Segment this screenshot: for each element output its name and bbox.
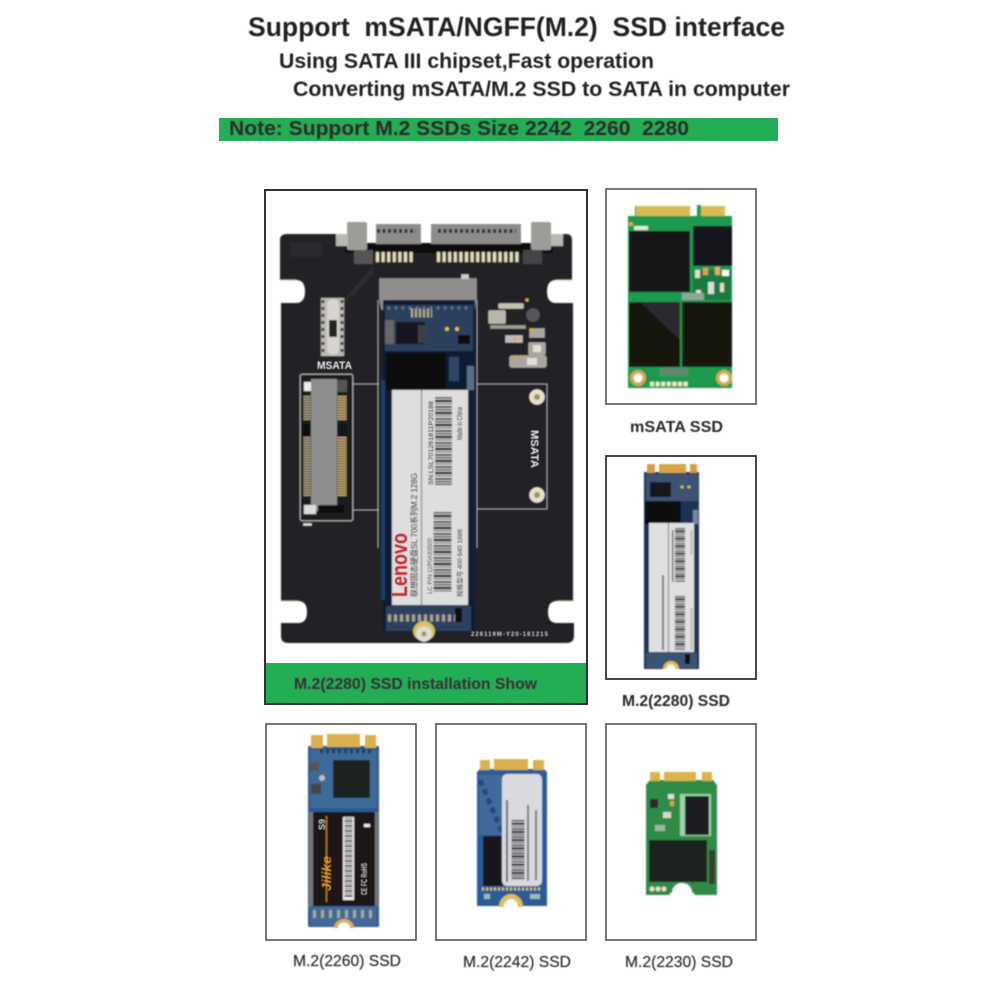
sticker model: S9 (317, 819, 327, 830)
SATA connector (336, 222, 563, 264)
mSATA socket (300, 374, 353, 526)
M.2 2242 card (477, 759, 547, 907)
title: Support mSATA/NGFF(M.2) SSD interface (248, 12, 785, 42)
label: M.2(2280) SSD: M.2(2280) SSD (622, 693, 730, 710)
label: mSATA SSD: mSATA SSD (630, 419, 723, 436)
code text: 规格型号 400 640 1886 (455, 529, 464, 597)
board serial silkscreen: 226119M-Y20-161215 (471, 632, 549, 638)
M.2 2260 card (308, 734, 379, 928)
adapter board (280, 222, 574, 643)
white outline lines and standoff screws (353, 300, 547, 548)
mSATA SSD card (628, 205, 732, 388)
panel: M.2 2280 installation show (265, 190, 587, 704)
label: M.2(2260) SSD: M.2(2260) SSD (293, 953, 401, 970)
subtitle line: chipset: Using SATA III chipset,Fast operation (279, 50, 654, 73)
panel: M.2 2230 SSD (606, 724, 756, 940)
panel: mSATA SSD (606, 189, 756, 404)
mode switch (321, 298, 344, 356)
model text: 联想固态硬盘SL 700系列M.2 128G (409, 473, 419, 597)
subtitle line: converting: Converting mSATA/M.2 SSD to SATA in computer (293, 78, 790, 101)
switch label: mSATA: MSATA (317, 360, 352, 372)
panel: M.2 2280 SSD (606, 456, 756, 679)
Lenovo M.2 2280 SSD (379, 274, 477, 642)
caption band (266, 663, 586, 703)
note banner: Note: Support M.2 SSDs Size 2242 2260 2280 (229, 117, 689, 140)
panel: M.2 2242 SSD (436, 724, 586, 940)
part number: LC P/N:11P0A93500 (427, 538, 434, 594)
panel: M.2 2260 SSD (266, 724, 416, 940)
M.2 2230 card (646, 772, 717, 903)
sticker marks: CE FC RoHS (360, 863, 369, 895)
serial number: SN:LSL701261811P20188 (428, 401, 435, 485)
label: M.2(2230) SSD: M.2(2230) SSD (625, 954, 733, 971)
brand text: Lenovo (387, 533, 412, 597)
made in China: Made in China (457, 407, 464, 440)
sticker brand: Jilike (319, 856, 334, 891)
caption band: M.2(2280) SSD installation Show (294, 676, 538, 693)
label: M.2(2242) SSD: M.2(2242) SSD (463, 954, 571, 971)
power components (488, 298, 547, 368)
M.2 2280 card (644, 464, 699, 669)
board label: mSATA rotated: MSATA (528, 430, 540, 468)
